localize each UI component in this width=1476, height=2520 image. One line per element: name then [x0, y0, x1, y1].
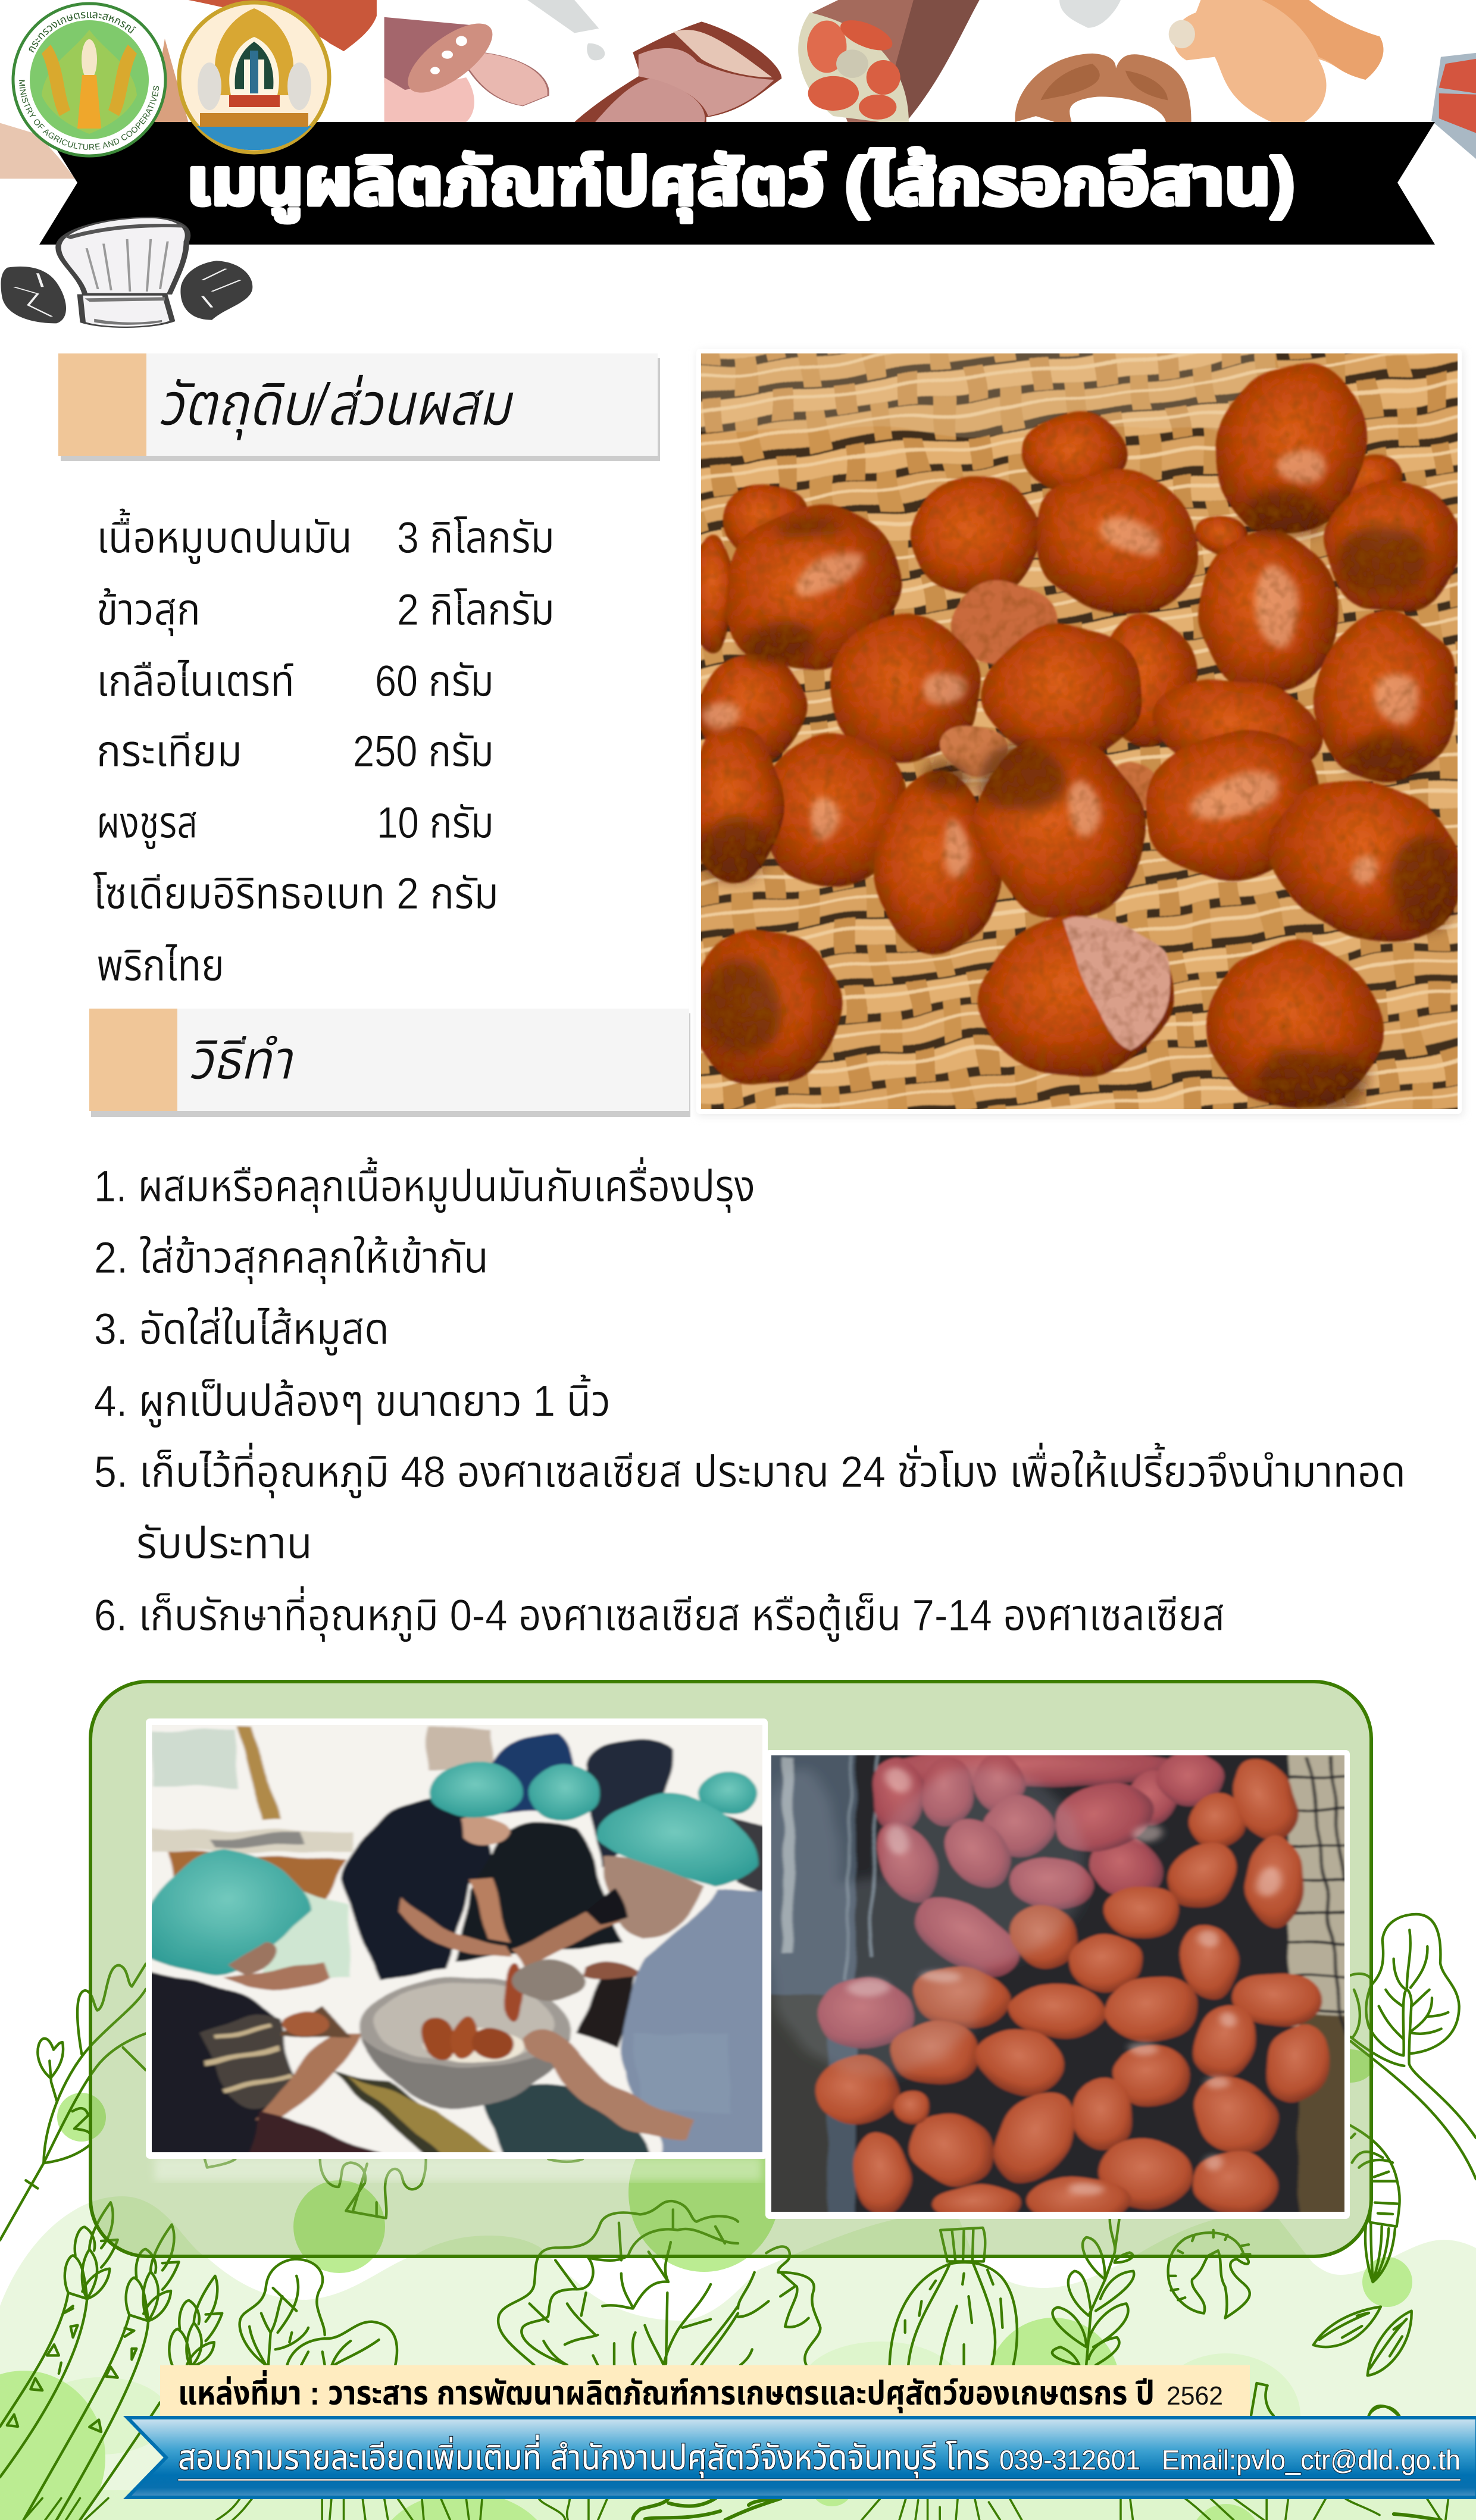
leaf pair [1314, 2307, 1412, 2375]
shadow [91, 1013, 690, 1117]
plant: herb sprig [1052, 2220, 1134, 2365]
heading text: วัตถุดิบ/ส่วนผสม [158, 371, 514, 441]
icon: leg of meat cross-section [798, 0, 980, 122]
ingredients list [93, 508, 555, 990]
title: เมนูผลิตภัณฑ์ปศุสัตว์ (ไส้กรอกอีสาน) [186, 145, 1295, 223]
step 1: 1. ผสมหรือคลุกเนื้อหมูปนมันกับเครื่องปรุง [94, 1157, 755, 1213]
asparagus two [24, 2225, 179, 2520]
leaf: large tree-shaped [1350, 1914, 1476, 2179]
method steps [94, 1157, 1406, 1642]
vegetable: carrot [1350, 2125, 1400, 2282]
section heading: ingredients [58, 353, 660, 461]
icon: salami [384, 17, 548, 122]
icon: right meat [180, 261, 252, 320]
decorative lighter blobs [0, 2341, 1476, 2520]
stem three [80, 2402, 160, 2520]
decorative green blobs [0, 2049, 1412, 2520]
section heading: method [89, 1009, 690, 1117]
photo frame [146, 1718, 768, 2159]
quantity: 250 g: 250 กรัม [353, 727, 494, 776]
icon: skin-toned meat at left [0, 123, 76, 179]
icon: meat red inside [1439, 59, 1476, 133]
ribbon shape [127, 2418, 1476, 2497]
char marks [693, 491, 1457, 1115]
icon: grey utensil [527, 0, 605, 60]
step 5 continued: รับประทาน [136, 1519, 312, 1568]
email: Email:pvlo_ctr@dld.go.th [1162, 2444, 1461, 2475]
underline [178, 2479, 1461, 2481]
icon: meat cut at right edge [1431, 53, 1476, 159]
heading bar [58, 353, 658, 456]
icon: grey utensil two [1059, 0, 1121, 28]
plant: asparagus and leafy greens, lower left [0, 2159, 738, 2520]
peach tab [58, 353, 146, 456]
logo: Department of Livestock Development [179, 2, 329, 152]
photo: women making sausages [139, 1715, 775, 2162]
step 6: 6. เก็บรักษาที่อุณหภูมิ 0-4 องศาเซลเซียส หรือตู้เย็น 7-14 องศาเซลเซียส [94, 1586, 1225, 1642]
plant: monstera leaf [1168, 2230, 1250, 2318]
icon: sausage link [1015, 54, 1192, 122]
banner shape [39, 122, 1435, 245]
source text: แหล่งที่มา : วาระสาร การพัฒนาผลิตภัณฑ์การเกษตรและปศุสัตว์ของเกษตรกร ปี [178, 2369, 1155, 2413]
plant stems below ribbon [24, 2498, 1449, 2520]
glossy highlights [703, 450, 1419, 885]
source year: 2562 [1167, 2381, 1223, 2411]
logo: Ministry of Agriculture and Cooperatives: MINISTRY OF AGRICULTURE AND COOPERATIVES [19, 80, 160, 150]
ingredient: sodium erythorbate: โซเดียมอิริทธอเบท 2 กรัม [93, 869, 499, 918]
ingredient: nitrate salt: เกลือไนเตรท์ [96, 656, 295, 706]
photo: fried Isan sausages on basket [676, 328, 1476, 1133]
icon: left meat [1, 267, 66, 323]
icon: hat band [80, 295, 173, 327]
photo shadow [698, 351, 1463, 1116]
bar background [160, 2365, 1250, 2418]
white glow under photos [155, 2157, 762, 2181]
logo: Ministry of Agriculture and Cooperatives: กระทรวงเกษตรและสหกรณ์ [29, 12, 136, 52]
ingredient: pork: เนื้อหมูบดปนมัน [96, 508, 352, 564]
contact ribbon [127, 2418, 1476, 2497]
leaf: lettuce right edge [738, 2246, 820, 2365]
leaf arch above ribbon [1369, 2406, 1399, 2416]
plant: left vine [0, 1964, 146, 2240]
contact text: สอบถามรายละเอียดเพิ่มเติมที่ สำนักงานปศุสัตว์จังหวัดจันทบุรี โทร [178, 2434, 990, 2478]
icon: red meat behind logos [188, 0, 377, 51]
step 4: 4. ผูกเป็นปล้องๆ ขนาดยาว 1 นิ้ว [94, 1374, 611, 1428]
ingredient: rice: ข้าวสุก [96, 585, 201, 636]
plant: squash, herb, monstera, lower right [738, 2220, 1399, 2416]
smoke [756, 1768, 1086, 2075]
shadow [61, 358, 660, 461]
step 2: 2. ใส่ข้าวสุกคลุกให้เข้ากัน [94, 1233, 489, 1284]
title banner [39, 122, 1435, 245]
ingredient: garlic: กระเทียม [96, 727, 242, 776]
leaf: spinach [240, 2259, 397, 2365]
heading text: วิธีทำ [188, 1030, 293, 1091]
vegetable: squash [890, 2228, 1017, 2365]
photo: sausages on smoking grill [756, 1745, 1359, 2223]
step 3: 3. อัดใส่ในไส้หมูสด [94, 1304, 389, 1356]
quantity: 3 kg: 3 กิโลกรัม [397, 513, 555, 562]
plant: tree leaf, carrot, leaves, right edge [1314, 1914, 1476, 2416]
photo frame [765, 1750, 1350, 2219]
phone number: 039-312601 [999, 2444, 1140, 2475]
heading bar [89, 1009, 689, 1111]
meat illustrations strip [0, 0, 1476, 179]
quantity: 10 g: 10 กรัม [377, 798, 494, 847]
icon: hat crown [58, 217, 187, 294]
ingredient: MSG: ผงชูรส [96, 798, 198, 849]
leaf: mushroom shape in panel [320, 2159, 426, 2218]
pale green hill background [0, 2196, 1476, 2520]
icon: ham [574, 21, 781, 122]
icon: chicken leg [1169, 0, 1383, 122]
icon: tan meat edge [151, 39, 188, 122]
panel: green photo frame [90, 1682, 1371, 2256]
icon: chef hat with meat [1, 217, 252, 327]
logo: Ministry of Agriculture and Cooperatives [12, 2, 167, 157]
source bar [160, 2365, 1250, 2418]
leaf: lettuce [498, 2201, 738, 2365]
asparagus three [169, 2276, 222, 2366]
quantity: 60 g: 60 กรัม [375, 656, 494, 706]
asparagus one [0, 2202, 118, 2477]
quantity: 2 kg: 2 กิโลกรัม [397, 585, 555, 634]
leaf: small fragments in panel [205, 2159, 583, 2168]
peach tab [89, 1009, 177, 1111]
plant: stalk behind ribbon [1251, 2383, 1274, 2416]
ingredient: pepper: พริกไทย [96, 941, 224, 990]
photo frame [696, 349, 1462, 1114]
